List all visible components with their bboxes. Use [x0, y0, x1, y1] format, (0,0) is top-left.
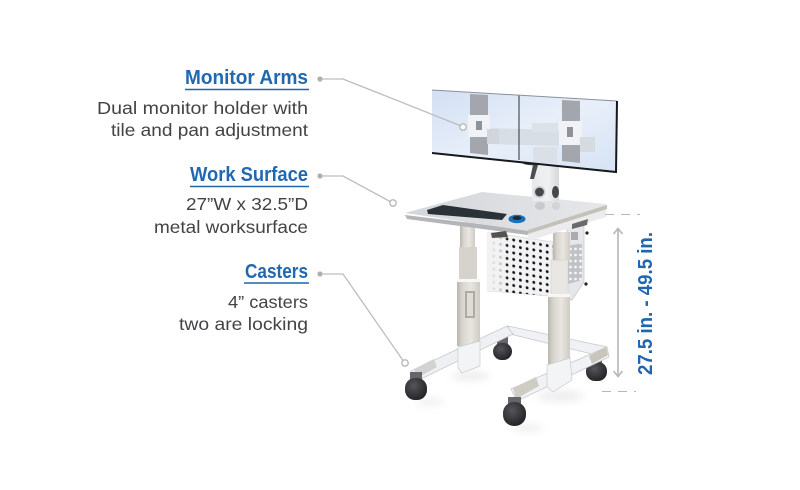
text: work surface description: metal worksurface [154, 217, 308, 237]
side bracket [566, 226, 589, 300]
perforated cable panel [488, 232, 553, 296]
base frame [411, 326, 609, 401]
callout: casters [179, 261, 309, 334]
right leg [547, 232, 572, 392]
caster: rear right [586, 357, 607, 381]
height dimension arrow [602, 214, 640, 392]
leader line: work surface [317, 173, 396, 206]
text: monitor arms description [97, 98, 308, 140]
text: work surface description: 27”W x 32.5”D [186, 194, 308, 214]
text: casters description: two are locking [179, 314, 308, 334]
mouse [508, 215, 526, 223]
height range label: 27.5 in. - 49.5 in. [635, 232, 657, 375]
caster: front right [503, 397, 526, 426]
text: monitor arms description: Dual monitor holder with [97, 98, 308, 118]
callout: work surface [154, 164, 309, 237]
heading: work surface: Work Surface [190, 164, 308, 186]
callout: monitor arms [97, 67, 309, 140]
leader line: monitor arms [317, 76, 466, 130]
text: monitor arms description: tile and pan adjustment [111, 120, 308, 140]
illustration: height-adjustable cart [405, 90, 617, 431]
heading: monitor arms: Monitor Arms [185, 67, 308, 89]
caster: rear left [493, 337, 512, 360]
text: casters description [179, 292, 308, 334]
work surface [405, 192, 607, 241]
left leg [457, 222, 480, 373]
floor shadows [416, 372, 584, 431]
monitor arm behind screen [468, 94, 595, 163]
heading: casters: Casters [245, 261, 308, 283]
keyboard [427, 205, 507, 220]
monitor stand [522, 160, 560, 210]
text: work surface description [154, 194, 308, 237]
text: casters description: 4” casters [228, 292, 308, 312]
caster: front left [405, 372, 427, 400]
dual monitors [432, 90, 617, 172]
leader line: casters [317, 271, 408, 366]
